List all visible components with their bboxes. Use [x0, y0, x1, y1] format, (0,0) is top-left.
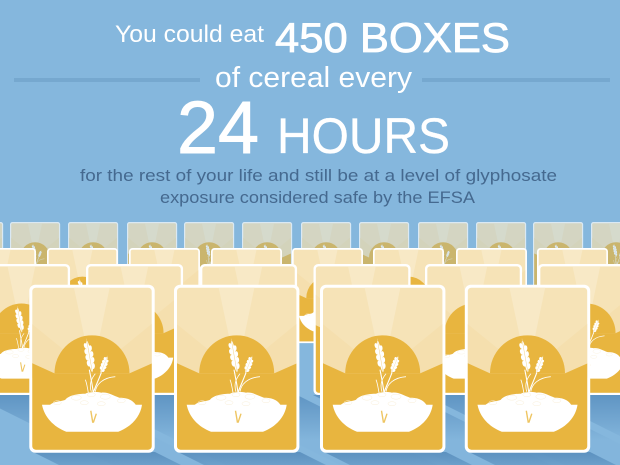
heading: 24 hours: HOURS: [277, 108, 450, 164]
third row of cereal boxes: [0, 248, 611, 343]
cereal box 4: [460, 285, 595, 453]
cereal box 1: [24, 285, 159, 453]
heading: You could eat 450 boxes: 450 BOXES: [275, 14, 510, 61]
heading: You could eat 450 boxes: [115, 14, 510, 61]
cereal box 3: [315, 285, 450, 453]
heading: 24 hours: [177, 86, 450, 169]
heading: of cereal every with side rules: of cereal every: [215, 62, 413, 94]
body text: for the rest of your life and still be at a level of glyphosate: [80, 166, 557, 185]
second row of cereal boxes: [0, 264, 620, 395]
long shadows of second row: [0, 395, 620, 465]
heading: of cereal every with side rules: [14, 62, 610, 94]
body text: exposure considered safe by the EFSA: [160, 188, 476, 207]
long shadows of front row: [33, 452, 616, 465]
body text: [80, 166, 557, 207]
heading: You could eat 450 boxes: You could eat: [115, 21, 264, 48]
back row of cereal boxes: [0, 222, 620, 289]
heading: 24 hours: 24: [177, 86, 259, 169]
front row of cereal boxes: [24, 285, 595, 453]
cereal box 2: [169, 285, 304, 453]
